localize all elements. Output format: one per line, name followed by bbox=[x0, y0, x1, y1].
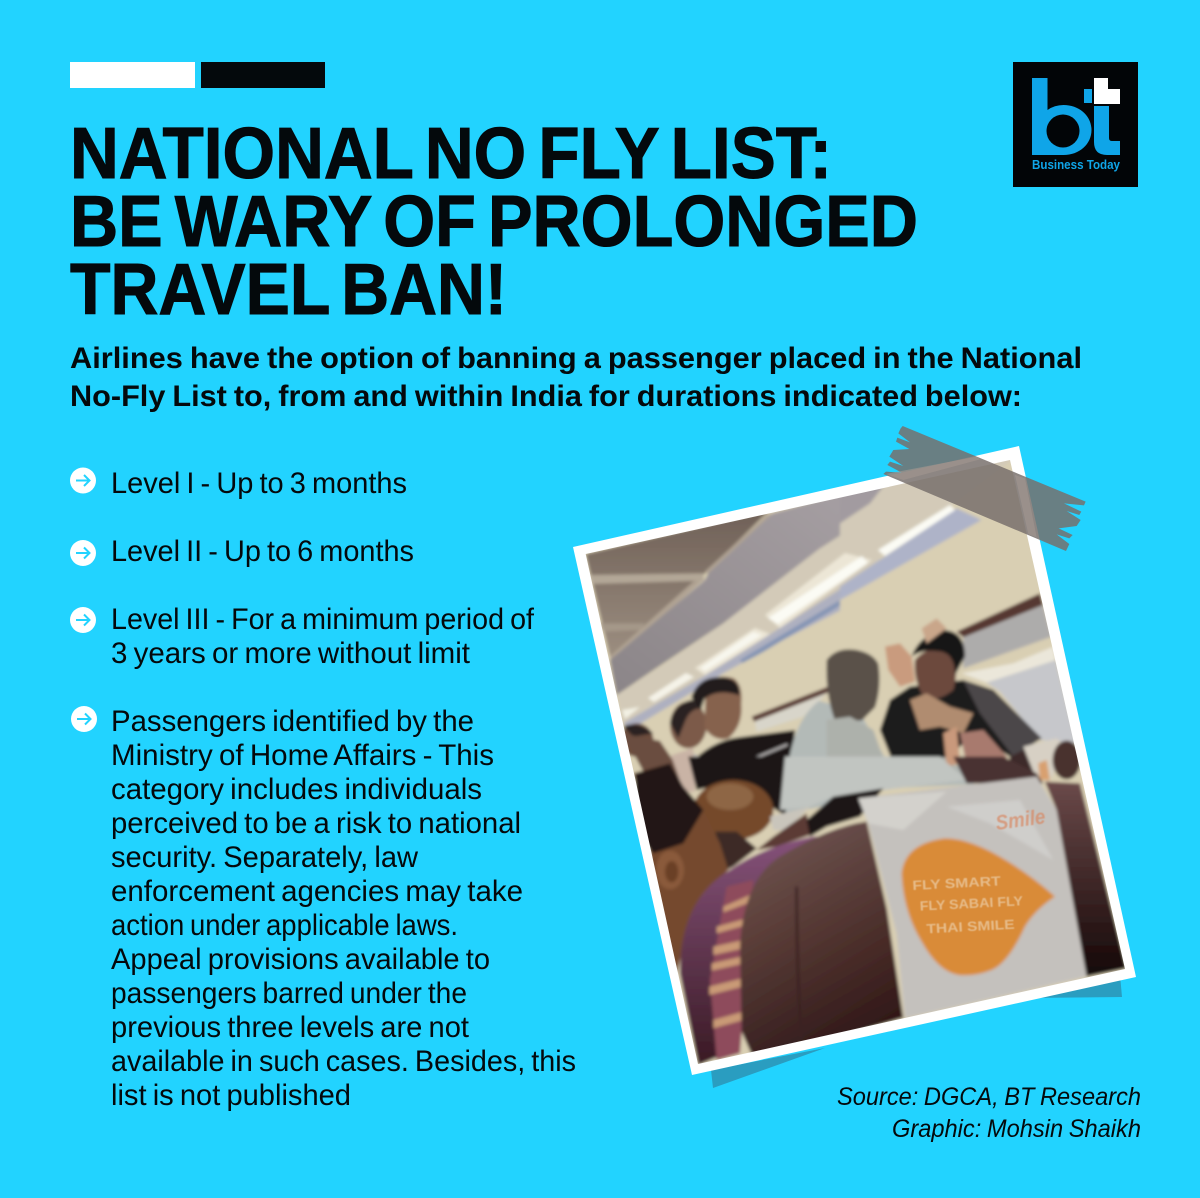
brown seat bbox=[740, 822, 903, 1062]
bullet icon: level II bbox=[70, 540, 96, 566]
bullet icon: level I bbox=[70, 468, 96, 494]
man in grey jacket bbox=[786, 701, 974, 814]
title: TRAVEL BAN! bbox=[70, 250, 507, 330]
bullet text: home affairs: previous three levels are not bbox=[111, 1011, 470, 1044]
source credits: Graphic: Mohsin Shaikh bbox=[892, 1115, 1141, 1143]
bullet text: home affairs: enforcement agencies may take bbox=[111, 875, 523, 908]
bullet text: home affairs: Appeal provisions available to bbox=[111, 943, 490, 976]
title: BE WARY OF PROLONGED bbox=[70, 182, 918, 262]
bullet text: home affairs bbox=[111, 705, 576, 1112]
bullet icon: level III bbox=[70, 607, 96, 633]
title bbox=[70, 114, 918, 330]
seat text: Smile bbox=[994, 805, 1047, 835]
subtitle: No-Fly List to, from and within India for durations indicated below: bbox=[70, 380, 1022, 413]
bullet text: home affairs: category includes individuals bbox=[111, 773, 482, 806]
bullet text: home affairs: Passengers identified by the bbox=[111, 705, 474, 738]
logo: Business Today bbox=[1013, 62, 1138, 187]
standing passengers bbox=[623, 677, 974, 817]
ceiling light panels bbox=[622, 505, 955, 719]
bullet text: level III: Level III - For a minimum period of bbox=[111, 603, 535, 636]
source credits bbox=[837, 1083, 1141, 1143]
bullet text: home affairs: security. Separately, law bbox=[111, 841, 418, 874]
tape bbox=[883, 426, 1086, 551]
bullet text: level II: Level II - Up to 6 months bbox=[111, 535, 414, 568]
photo: cabin scene bbox=[586, 460, 1125, 1064]
title: NATIONAL NO FLY LIST: bbox=[70, 114, 832, 194]
bullet text: home affairs: perceived to be a risk to national bbox=[111, 807, 521, 840]
bullet icon: home affairs bbox=[71, 706, 97, 732]
bullet text: home affairs: available in such cases. Besides, this bbox=[111, 1045, 576, 1078]
bullet text: level I: Level I - Up to 3 months bbox=[111, 467, 407, 500]
rear left passenger bbox=[634, 738, 680, 780]
bins and wall, upper right bbox=[838, 488, 1074, 744]
purple seat bbox=[680, 837, 830, 1065]
bullet text: home affairs: Ministry of Home Affairs - This bbox=[111, 739, 494, 772]
bullet text: level III: 3 years or more without limit bbox=[111, 637, 471, 670]
header accent bars bbox=[70, 62, 325, 88]
subtitle: Airlines have the option of banning a passenger placed in the National bbox=[70, 342, 1082, 375]
ceiling and lights, upper left bbox=[586, 498, 842, 758]
foreground seats and passengers bbox=[633, 757, 1127, 1065]
source credits: Source: DGCA, BT Research bbox=[837, 1083, 1141, 1111]
seat text: THAI SMILE bbox=[926, 917, 1015, 936]
bullet text: level III bbox=[111, 603, 535, 670]
bullet text: home affairs: passengers barred under the bbox=[111, 977, 467, 1010]
headrest cover bbox=[858, 777, 1087, 1018]
card shadow bbox=[711, 975, 1122, 1088]
right seat bbox=[1045, 782, 1127, 977]
logo: Business Today: Business Today bbox=[1032, 158, 1120, 172]
subtitle bbox=[70, 342, 1082, 413]
seat text: FLY SMART bbox=[912, 873, 1001, 893]
bullet text: home affairs: action under applicable laws. bbox=[111, 909, 458, 942]
seat text bbox=[912, 805, 1047, 936]
bullet text: home affairs: list is not published bbox=[111, 1079, 351, 1112]
photo card bbox=[570, 440, 1150, 1088]
cabin base bbox=[586, 460, 1125, 1064]
white card frame bbox=[573, 446, 1136, 1075]
orange drop bbox=[902, 838, 1055, 975]
seat text: FLY SABAI FLY bbox=[919, 893, 1023, 914]
fight scene bbox=[826, 618, 1081, 783]
man in black jacket bbox=[688, 730, 795, 817]
